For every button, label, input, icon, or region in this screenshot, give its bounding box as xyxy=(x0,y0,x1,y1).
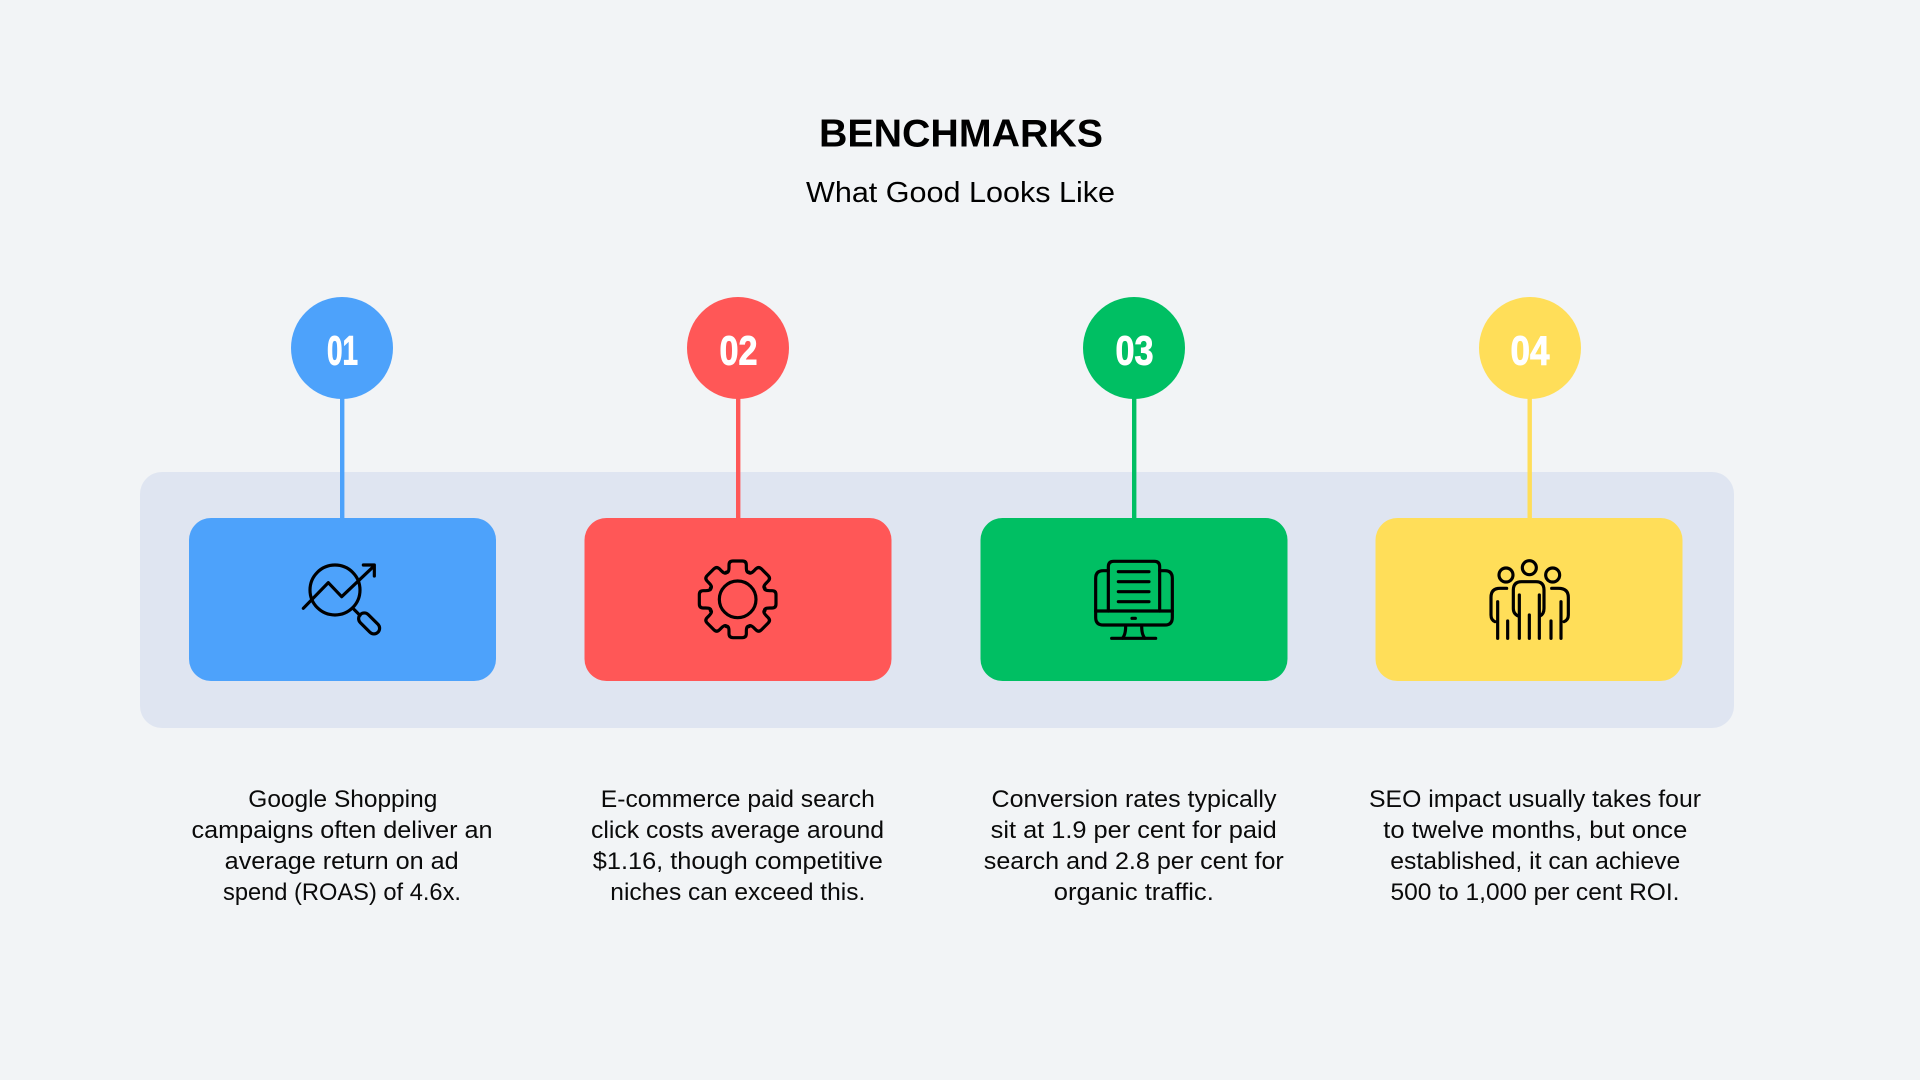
description 3: sit at 1.9 per cent for paid xyxy=(991,817,1277,844)
description 1 xyxy=(192,786,492,906)
description 4: to twelve months, but once xyxy=(1383,817,1687,844)
connector line 1 xyxy=(340,395,344,520)
description 3: Conversion rates typically xyxy=(992,786,1276,813)
card 4 xyxy=(1376,518,1682,681)
description 4: SEO impact usually takes four xyxy=(1369,786,1701,813)
card 3 xyxy=(980,518,1288,681)
benchmark 2: paid search cost xyxy=(584,297,892,906)
card 2 xyxy=(584,518,892,681)
icon: magnifying glass with growth chart xyxy=(303,565,382,636)
benchmark 3: conversion rates xyxy=(980,297,1288,906)
number badge 03: 03 xyxy=(1116,328,1154,374)
description 2 xyxy=(591,786,884,906)
benchmark 1: ROAS xyxy=(189,297,496,906)
panel: background band xyxy=(140,472,1734,728)
number badge 01: 01 xyxy=(327,328,358,374)
number badge 01 xyxy=(291,297,393,399)
icon: gear xyxy=(699,561,776,638)
description 1: spend (ROAS) of 4.6x. xyxy=(223,879,461,906)
description 3 xyxy=(984,786,1284,906)
connector line 3 xyxy=(1132,395,1136,520)
number badge 02 xyxy=(687,297,789,399)
description 2: niches can exceed this. xyxy=(610,879,865,906)
subheading: What Good Looks Like xyxy=(806,177,1115,209)
description 4: established, it can achieve xyxy=(1390,848,1680,875)
benchmark 4: SEO impact xyxy=(1369,297,1701,906)
description 2: E-commerce paid search xyxy=(601,786,875,813)
icon: desktop monitor with document xyxy=(1096,561,1172,638)
number badge 04 xyxy=(1479,297,1581,399)
description 4 xyxy=(1369,786,1701,906)
connector line 4 xyxy=(1528,395,1532,520)
description 1: Google Shopping xyxy=(248,786,437,813)
description 1: average return on ad xyxy=(225,848,459,875)
description 4: 500 to 1,000 per cent ROI. xyxy=(1390,879,1680,906)
icon: group of people xyxy=(1491,561,1568,638)
description 2: click costs average around xyxy=(591,817,884,844)
description 3: organic traffic. xyxy=(1054,879,1214,906)
description 3: search and 2.8 per cent for xyxy=(984,848,1284,875)
heading: BENCHMARKS xyxy=(819,112,1103,156)
number badge 02: 02 xyxy=(720,328,758,374)
description 2: $1.16, though competitive xyxy=(593,848,883,875)
description 1: campaigns often deliver an xyxy=(192,817,492,844)
connector line 2 xyxy=(736,395,740,520)
number badge 04: 04 xyxy=(1510,328,1550,374)
card 1 xyxy=(189,518,496,681)
title block xyxy=(806,112,1115,209)
number badge 03 xyxy=(1083,297,1185,399)
